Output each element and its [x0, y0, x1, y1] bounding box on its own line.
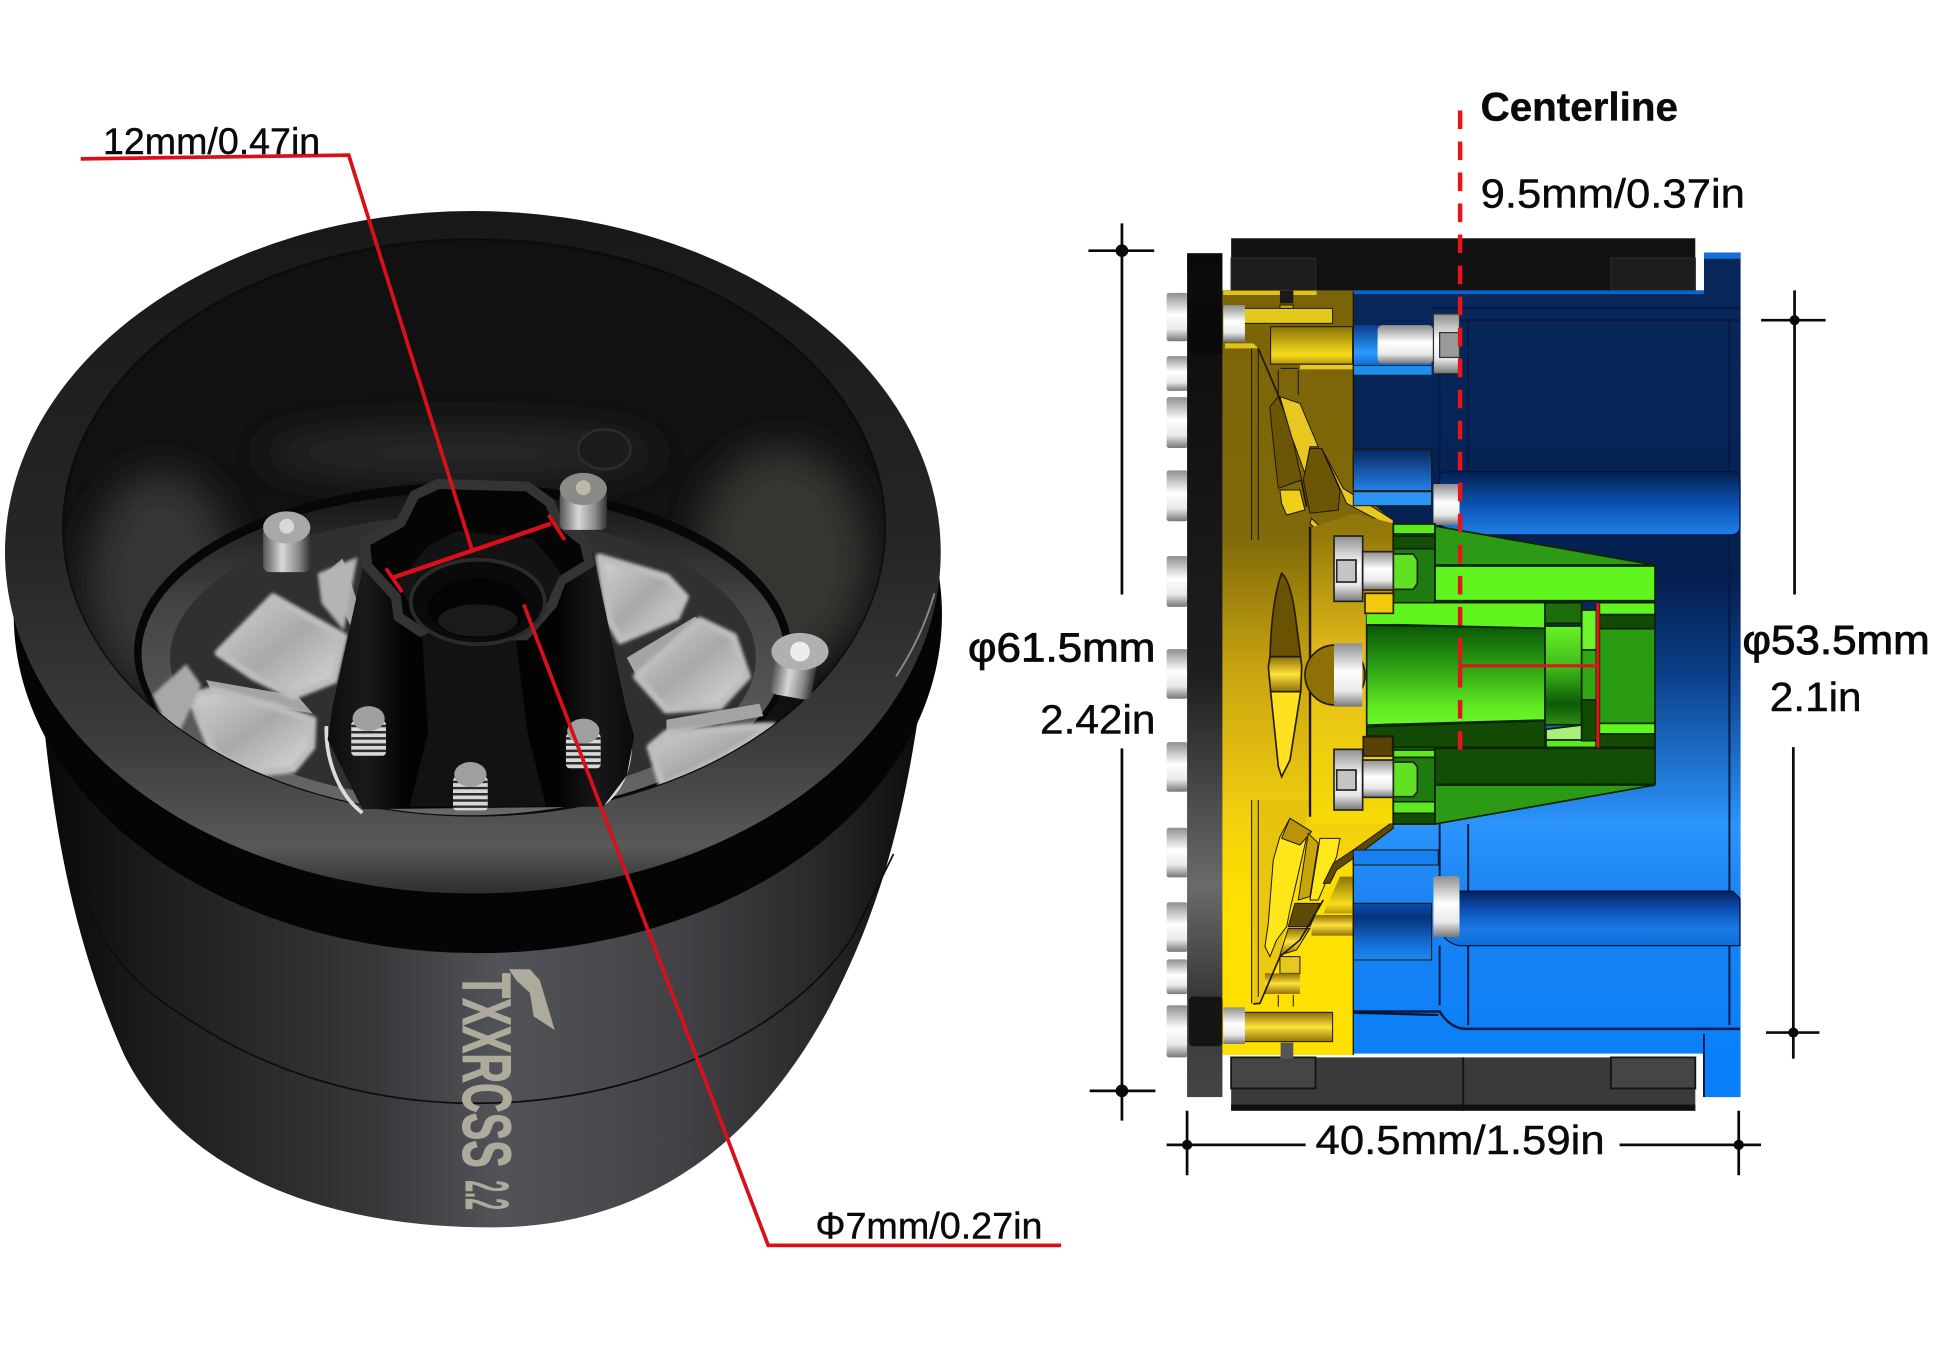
upper cylinder [1243, 308, 1333, 323]
yellow centre disc base [1222, 290, 1393, 1054]
lower spoke gold cap [1282, 818, 1312, 845]
disc top strip [1225, 343, 1258, 348]
white insert top [1433, 484, 1459, 525]
upper spoke dark piece [1270, 397, 1302, 488]
round window with silver pin [1305, 643, 1365, 707]
spoke windows [153, 557, 773, 787]
wheel lower body [37, 670, 925, 1227]
callout: 7mm leader line [524, 604, 1061, 1245]
silver screw head [1223, 305, 1245, 342]
label: 9.5mm offset: 9.5mm/0.37in [1481, 170, 1745, 216]
gold lower cylinder [1243, 1012, 1333, 1042]
hex socket floor [397, 531, 561, 614]
upper blue highlight band [1440, 472, 1740, 535]
label: outer diameter [968, 624, 1155, 742]
rear beadlock ring [14, 276, 942, 953]
label: outer diameter: φ61.5mm [968, 624, 1155, 670]
blue strips [1353, 850, 1438, 865]
yellow hub ramp [1312, 513, 1393, 823]
disc vertical lines [1307, 527, 1314, 817]
green bright band [1435, 566, 1655, 601]
silhouette edge between yellow and blue [1351, 292, 1355, 488]
inner ring strip [1582, 610, 1596, 650]
upper edge strip [1322, 448, 1393, 528]
bottom notch [1281, 1043, 1293, 1059]
lower spoke outer piece [1265, 818, 1308, 957]
blue section bolt top [1378, 314, 1459, 374]
top notch [1280, 291, 1293, 303]
diagonal edge [1258, 348, 1307, 507]
blue rim body [1353, 253, 1741, 1097]
inner bore step [1545, 603, 1582, 623]
label: 7mm: Φ7mm/0.27in [815, 1205, 1042, 1247]
upper spoke small bright piece [1280, 490, 1305, 515]
blue strip [1353, 492, 1432, 506]
green collar [1393, 524, 1435, 824]
TXXRCSS logo: TXXRCSS [448, 973, 524, 1168]
green dark lower bar [1435, 748, 1655, 784]
hub detail group, drawn in local units [1268, 513, 1655, 825]
dark spacer [1363, 737, 1393, 756]
centerline dashed [1458, 110, 1462, 751]
dimension: width lines [1167, 1111, 1761, 1175]
gold block upper [1323, 877, 1353, 913]
black caps and screw heads [1189, 304, 1222, 1046]
green bore cylinder [1367, 625, 1545, 725]
photo: black beadlock wheel [5, 211, 942, 1227]
rim edge highlight [896, 593, 935, 676]
silver base arcs [326, 726, 630, 813]
hatch pillar [1280, 957, 1300, 973]
gold block [1312, 915, 1353, 936]
lower right bright block [1302, 938, 1353, 1007]
lower spoke dark block [1288, 903, 1320, 927]
dark lower sleeve [1367, 721, 1545, 747]
top strips [1223, 291, 1317, 295]
valve hole reflection [578, 429, 630, 469]
logo swoosh [509, 969, 555, 1030]
diagonal edge [1253, 900, 1323, 1004]
hex adapter star [365, 484, 590, 644]
label: centerline: Centerline [1481, 85, 1678, 129]
green cone bottom [1435, 785, 1655, 824]
screw left [263, 511, 310, 572]
dimension: inner diameter lines [1761, 290, 1826, 1059]
gold post [1271, 327, 1353, 364]
barrel reflections [87, 428, 869, 695]
label: inner diameter [1742, 617, 1930, 720]
bottom yellow block [1223, 1007, 1353, 1055]
front outer rim [5, 211, 941, 894]
stud right [566, 719, 601, 768]
red offset dimension [1460, 603, 1598, 747]
upper spoke dark piece two [1303, 448, 1340, 513]
seam line on wheel body [70, 854, 894, 1103]
brown edge band [1323, 822, 1393, 883]
inner barrel of wheel [63, 240, 885, 815]
upper hub bolt [1334, 536, 1417, 601]
label: outer diameter: 2.42in [1040, 696, 1155, 742]
disc lines [1252, 800, 1258, 1003]
label: 12mm: 12mm/0.47in [103, 120, 320, 162]
green sleeve [1367, 603, 1545, 628]
label: inner diameter: φ53.5mm [1742, 617, 1930, 663]
hatch bottom [1278, 995, 1293, 1007]
centre bore [411, 560, 545, 644]
lens cutout [1268, 573, 1302, 777]
stud bottom [453, 762, 488, 810]
right end pieces [1599, 603, 1655, 615]
locating lozenge [1280, 305, 1293, 308]
lower hub bolt [1334, 749, 1417, 810]
upper spoke bright piece [1280, 397, 1318, 473]
silver flange bolts [1167, 293, 1188, 1057]
black tire-side ring top [1231, 238, 1695, 292]
spoke ring [134, 483, 792, 820]
lower spoke bright strip [1310, 838, 1340, 900]
screw far right [769, 633, 829, 701]
lower blue highlight band [1440, 891, 1740, 946]
lower yellow and blue details [1223, 800, 1438, 1059]
green cone top [1435, 526, 1655, 565]
post bright strip [1300, 365, 1353, 369]
label: inner diameter: 2.1in [1770, 674, 1862, 720]
disc gold zone [1252, 800, 1310, 1003]
stud left [351, 706, 386, 756]
lower spoke gold strip [1298, 833, 1318, 900]
blue bright band [1353, 449, 1432, 491]
gold spacer [1365, 593, 1393, 613]
hatch lines [1278, 368, 1298, 395]
blue bolt slot [1353, 325, 1432, 365]
blue divider [1353, 1013, 1438, 1015]
disc vertical lines [1252, 348, 1258, 540]
silver lower screw [1223, 1007, 1245, 1044]
spoke bars [206, 558, 763, 733]
disc bright strip [1223, 800, 1252, 1003]
dimension: outer diameter lines [1088, 223, 1155, 1121]
bolts and studs [263, 473, 829, 810]
TXXRCSS logo [448, 969, 555, 1210]
neck centre slot [410, 633, 546, 807]
lower spoke bright foot [1280, 928, 1310, 955]
callout: 12mm leader line [81, 155, 565, 592]
black left flange [1187, 253, 1222, 1097]
upper yellow and blue details [1223, 291, 1432, 540]
small strip [1310, 518, 1328, 537]
silhouette edge between yellow and blue [1351, 857, 1355, 1055]
blue dark band [1353, 903, 1432, 960]
section drawing of wheel [1167, 110, 1741, 1111]
label: width: 40.5mm/1.59in [1316, 1117, 1605, 1163]
hub neck [328, 521, 634, 809]
screw right [560, 473, 607, 530]
blue slot strip [1353, 366, 1432, 375]
white insert bottom [1433, 876, 1459, 937]
dark ring bottom [1231, 1057, 1695, 1111]
photo: black beadlock wheel: 2.2 [451, 1180, 520, 1210]
